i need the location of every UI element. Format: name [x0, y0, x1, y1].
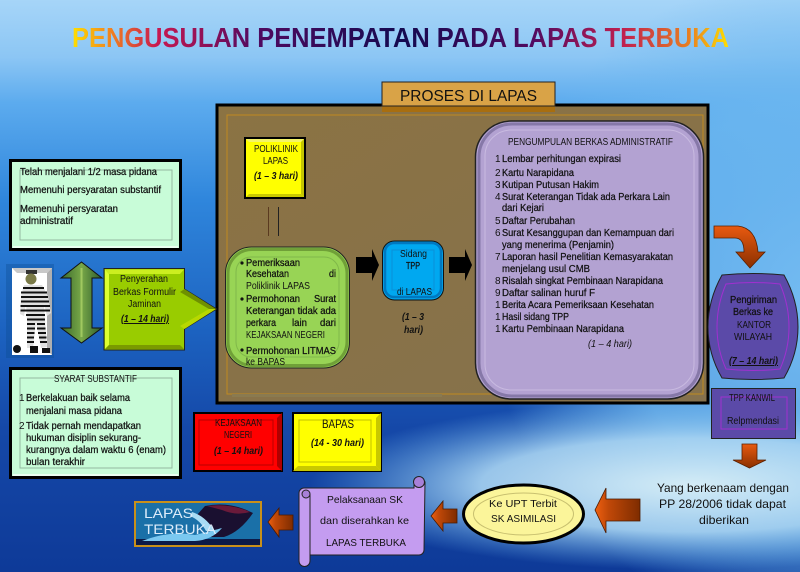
arrow: curved to pengiriman [714, 226, 765, 268]
scroll: pelaksanaan sk [299, 476, 425, 566]
box: syarat substantif: bulan terakhir [26, 457, 86, 468]
box: kejaksaan negeri: NEGERI [224, 430, 252, 441]
connector: parallel lines [268, 207, 278, 236]
box: pengiriman berkas ke kantor wilayah [708, 274, 798, 380]
panel: pengumpulan berkas administratif: Surat Keterangan Tidak ada Perkara Lain [502, 192, 670, 203]
text: catatan pp 28/2006: Yang berkenaam dengan [657, 481, 789, 495]
box: pemeriksaan dan permohonan: lain [292, 318, 307, 329]
box: syarat umum: Memenuhi persyaratan substantif [20, 185, 161, 196]
box: tpp kanwil: TPP KANWIL [729, 393, 775, 404]
heading: proses di lapas: PROSES DI LAPAS [400, 88, 537, 105]
box: kejaksaan negeri [194, 413, 282, 471]
arrow: penyerahan berkas formulir jaminan: (1 – 14 hari) [121, 314, 170, 325]
box: sidang tpp: di LAPAS [397, 287, 432, 298]
arrow: double vertical [61, 262, 102, 343]
panel: pengumpulan berkas administratif: 4 [495, 192, 501, 203]
arrow: to scroll [431, 501, 457, 531]
panel: pengumpulan berkas administratif: (1 – 4 hari) [588, 339, 632, 350]
arrow: to sidang [356, 249, 379, 281]
panel: pengumpulan berkas administratif: Laporan hasil Penelitian Kemasyarakatan [502, 252, 673, 263]
label: sidang duration: hari) [404, 325, 424, 336]
arrow: to ke upt [595, 488, 640, 533]
panel: pengumpulan berkas administratif: menjelang usul CMB [502, 264, 590, 275]
panel: pengumpulan berkas administratif: dari Kejari [502, 203, 544, 214]
scroll: pelaksanaan sk: Pelaksanaan SK [327, 494, 403, 506]
arrow: penyerahan berkas formulir jaminan: Penyerahan [120, 274, 168, 285]
panel: pengumpulan berkas administratif: 1 [495, 300, 501, 311]
box: kejaksaan negeri: (1 – 14 hari) [214, 446, 264, 457]
box: syarat substantif: menjalani masa pidana [26, 406, 122, 417]
label: sidang duration: (1 – 3 [402, 312, 424, 323]
box: syarat substantif: Berkelakuan baik selama [26, 393, 130, 404]
box: pemeriksaan dan permohonan: KEJAKSAAN NEGERI [246, 330, 325, 341]
box: syarat substantif: 2 [19, 421, 25, 432]
panel: pengumpulan berkas administratif: Daftar Perubahan [502, 216, 575, 227]
panel: pengumpulan berkas administratif: Daftar salinan huruf F [502, 288, 595, 299]
panel: pengumpulan berkas administratif: Hasil sidang TPP [502, 312, 569, 323]
box: syarat umum: administratif [20, 216, 73, 227]
panel: pengumpulan berkas administratif: 5 [495, 216, 501, 227]
box: syarat umum [10, 160, 180, 250]
box: pemeriksaan dan permohonan: Pemeriksaan [246, 258, 300, 269]
box: tpp kanwil [712, 388, 796, 438]
ellipse: ke upt terbit sk asimilasi: SK ASIMILASI [491, 513, 556, 525]
text: catatan pp 28/2006: PP 28/2006 tidak dapat [659, 497, 787, 511]
box: syarat substantif: Tidak pernah mendapatkan [26, 421, 141, 432]
panel: pengumpulan berkas administratif: 3 [495, 180, 501, 191]
box: poliklinik lapas: (1 – 3 hari) [254, 171, 299, 182]
arrow: down from tpp kanwil [733, 444, 766, 468]
box: sidang tpp: TPP [406, 261, 420, 272]
panel: pengumpulan berkas administratif: 7 [495, 252, 501, 263]
icon: prisoner [6, 264, 54, 358]
panel: pengumpulan berkas administratif: yang menerima (Penjamin) [502, 240, 614, 251]
panel: pengumpulan berkas administratif: 9 [495, 288, 501, 299]
panel: pengumpulan berkas administratif: 1 [495, 154, 501, 165]
picture: lapas terbuka: LAPAS [144, 505, 193, 521]
box: pemeriksaan dan permohonan: Poliklinik LAPAS [246, 281, 310, 292]
arrow: to administrative collection [449, 249, 472, 281]
box: pengiriman berkas ke kantor wilayah: (7 – 14 hari) [729, 356, 779, 367]
text: catatan pp 28/2006 [657, 481, 789, 527]
box: pemeriksaan dan permohonan: di [329, 269, 336, 280]
box: syarat umum: Telah menjalani 1/2 masa pidana [20, 167, 157, 178]
box: poliklinik lapas: LAPAS [263, 156, 288, 167]
text: catatan pp 28/2006: diberikan [699, 513, 749, 527]
heading: proses di lapas [382, 82, 555, 112]
ellipse: ke upt terbit sk asimilasi: Ke UPT Terbit [489, 498, 557, 510]
panel: pengumpulan berkas administratif: Kartu Pembinaan Narapidana [502, 324, 624, 335]
panel: pengumpulan berkas administratif: Kartu Narapidana [502, 168, 574, 179]
panel: pengumpulan berkas administratif: PENGUMPULAN BERKAS ADMINISTRATIF [508, 137, 673, 148]
box: pengiriman berkas ke kantor wilayah: WILAYAH [734, 332, 772, 343]
box: pemeriksaan dan permohonan: Keterangan tidak ada [246, 306, 336, 317]
box: syarat substantif: hukuman disiplin sekurang- [26, 433, 141, 444]
label: sidang duration [402, 312, 424, 336]
panel: pengumpulan berkas administratif: 8 [495, 276, 501, 287]
box: pemeriksaan dan permohonan: Permohonan LITMAS [246, 346, 336, 357]
panel: pengumpulan berkas administratif: Lembar perhitungan expirasi [502, 154, 621, 165]
picture: lapas terbuka [135, 502, 261, 546]
panel: pengumpulan berkas administratif: 1 [495, 324, 501, 335]
box: poliklinik lapas: POLIKLINIK [254, 144, 298, 155]
panel: pengumpulan berkas administratif: 1 [495, 312, 501, 323]
box: pengiriman berkas ke kantor wilayah: Pengiriman [730, 295, 777, 306]
arrow: penyerahan berkas formulir jaminan [104, 268, 216, 350]
box: syarat substantif: SYARAT SUBSTANTIF [54, 374, 137, 385]
title: PENGUSULAN PENEMPATAN PADA LAPAS TERBUKA [72, 22, 729, 53]
scroll: pelaksanaan sk: dan diserahkan ke [320, 515, 409, 527]
box: pemeriksaan dan permohonan: Kesehatan [246, 269, 289, 280]
panel: pengumpulan berkas administratif: Kutipan Putusan Hakim [502, 180, 599, 191]
box: bapas: BAPAS [322, 419, 354, 431]
arrow: to lapas terbuka [268, 508, 293, 537]
box: syarat substantif: 1 [19, 393, 25, 404]
box: kejaksaan negeri: KEJAKSAAN [215, 418, 262, 429]
box: pemeriksaan dan permohonan [226, 247, 350, 368]
box: pengiriman berkas ke kantor wilayah: Berkas ke [733, 307, 773, 318]
arrow: penyerahan berkas formulir jaminan: Jaminan [128, 299, 161, 310]
panel: pengumpulan berkas administratif: 2 [495, 168, 501, 179]
scroll: pelaksanaan sk: LAPAS TERBUKA [326, 537, 406, 549]
box: bapas [293, 413, 381, 471]
box: pemeriksaan dan permohonan: Permohonan [246, 294, 300, 305]
panel: pengumpulan berkas administratif: 6 [495, 228, 501, 239]
panel: pengumpulan berkas administratif [476, 121, 704, 399]
ellipse: ke upt terbit sk asimilasi [464, 485, 584, 543]
panel: pengumpulan berkas administratif: Risalah singkat Pembinaan Narapidana [502, 276, 663, 287]
picture: lapas terbuka: TERBUKA [144, 521, 217, 537]
box: tpp kanwil: Relpmendasi [727, 416, 779, 427]
box: pemeriksaan dan permohonan: Surat [314, 294, 336, 305]
arrow: penyerahan berkas formulir jaminan: Berkas Formulir [113, 287, 177, 298]
panel: pengumpulan berkas administratif: Surat Kesanggupan dan Kemampuan dari [502, 228, 674, 239]
panel: pengumpulan berkas administratif: Berita Acara Pemeriksaan Kesehatan [502, 300, 654, 311]
box: bapas: (14 - 30 hari) [311, 438, 365, 449]
box: pemeriksaan dan permohonan: dari [320, 318, 336, 329]
box: pemeriksaan dan permohonan: ke BAPAS [246, 357, 285, 368]
box: sidang tpp: Sidang [400, 249, 427, 260]
box: sidang tpp [382, 241, 444, 300]
box: poliklinik lapas [245, 138, 305, 198]
box: syarat umum: Memenuhi persyaratan [20, 204, 118, 215]
box: syarat substantif: kurangnya dalam waktu 6 (enam) [26, 445, 166, 456]
box: pengiriman berkas ke kantor wilayah: KANTOR [737, 320, 771, 331]
box: syarat substantif [10, 368, 180, 478]
panel: proses di lapas [217, 105, 708, 403]
box: pemeriksaan dan permohonan: perkara [246, 318, 276, 329]
